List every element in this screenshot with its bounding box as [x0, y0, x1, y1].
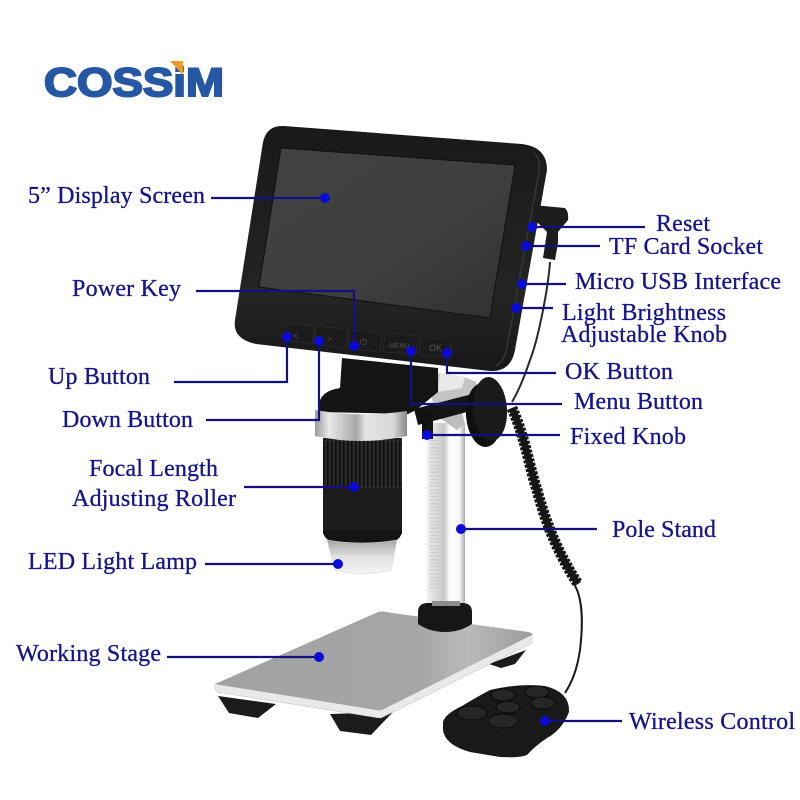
working stage plate [215, 612, 532, 735]
callout: reset [527, 211, 710, 237]
front buttons: MENU [389, 343, 410, 350]
front buttons: ⏻ [360, 337, 367, 347]
callout: fixed knob [422, 424, 686, 450]
callout: wireless control: Wireless Control [629, 709, 795, 735]
microscope illustration [215, 126, 582, 757]
callout: pole stand: Pole Stand [612, 517, 716, 543]
callout: TF card socket: TF Card Socket [609, 234, 763, 260]
callout: menu button [406, 346, 703, 415]
callout: power key [72, 276, 359, 351]
callout: menu button: Menu Button [574, 389, 703, 415]
callout: LED light lamp [28, 549, 343, 575]
display body [235, 126, 547, 371]
callout: focal length adjusting roller: Focal Length [89, 456, 218, 482]
front buttons [282, 324, 452, 358]
callout: focal length adjusting roller [72, 456, 359, 512]
callout: up button [48, 332, 292, 390]
callout: working stage [16, 641, 324, 667]
callout: fixed knob: Fixed Knob [570, 424, 686, 450]
callout: TF card socket [521, 234, 763, 260]
5 inch screen [259, 148, 515, 318]
callout: 5 inch display screen: 5” Display Screen [28, 183, 205, 209]
callout: LED light lamp: LED Light Lamp [28, 549, 197, 575]
bracket and fixed knob [414, 373, 509, 448]
coiled cable [512, 262, 582, 693]
callout: down button: Down Button [62, 407, 193, 433]
audio connector [533, 205, 568, 260]
callout: OK button [442, 348, 673, 385]
logo: COSSIM: COSSiM [44, 61, 224, 105]
callout: light brightness adjustable knob: Adjustable Knob [561, 322, 727, 348]
callout: pole stand [456, 517, 716, 543]
callout: up button: Up Button [48, 364, 150, 390]
callout: light brightness adjustable knob [511, 300, 727, 348]
callout: micro USB interface: Micro USB Interface [575, 269, 781, 295]
front buttons: > [327, 334, 332, 344]
callout: OK button: OK Button [565, 359, 673, 385]
front buttons: < [293, 331, 298, 341]
callout: 5 inch display screen [28, 183, 330, 209]
wireless control [443, 685, 569, 757]
callout: wireless control [540, 709, 795, 735]
callout: focal length adjusting roller: Adjusting Roller [72, 486, 236, 512]
pole stand [418, 423, 472, 632]
focal roller and camera barrel [315, 358, 438, 574]
front buttons: OK [429, 343, 442, 353]
callout: power key: Power Key [72, 276, 181, 302]
callout: down button [62, 336, 324, 433]
callout: light brightness adjustable knob: Light Brightness [562, 300, 726, 326]
callout: reset: Reset [656, 211, 710, 237]
callout: working stage: Working Stage [16, 641, 161, 667]
